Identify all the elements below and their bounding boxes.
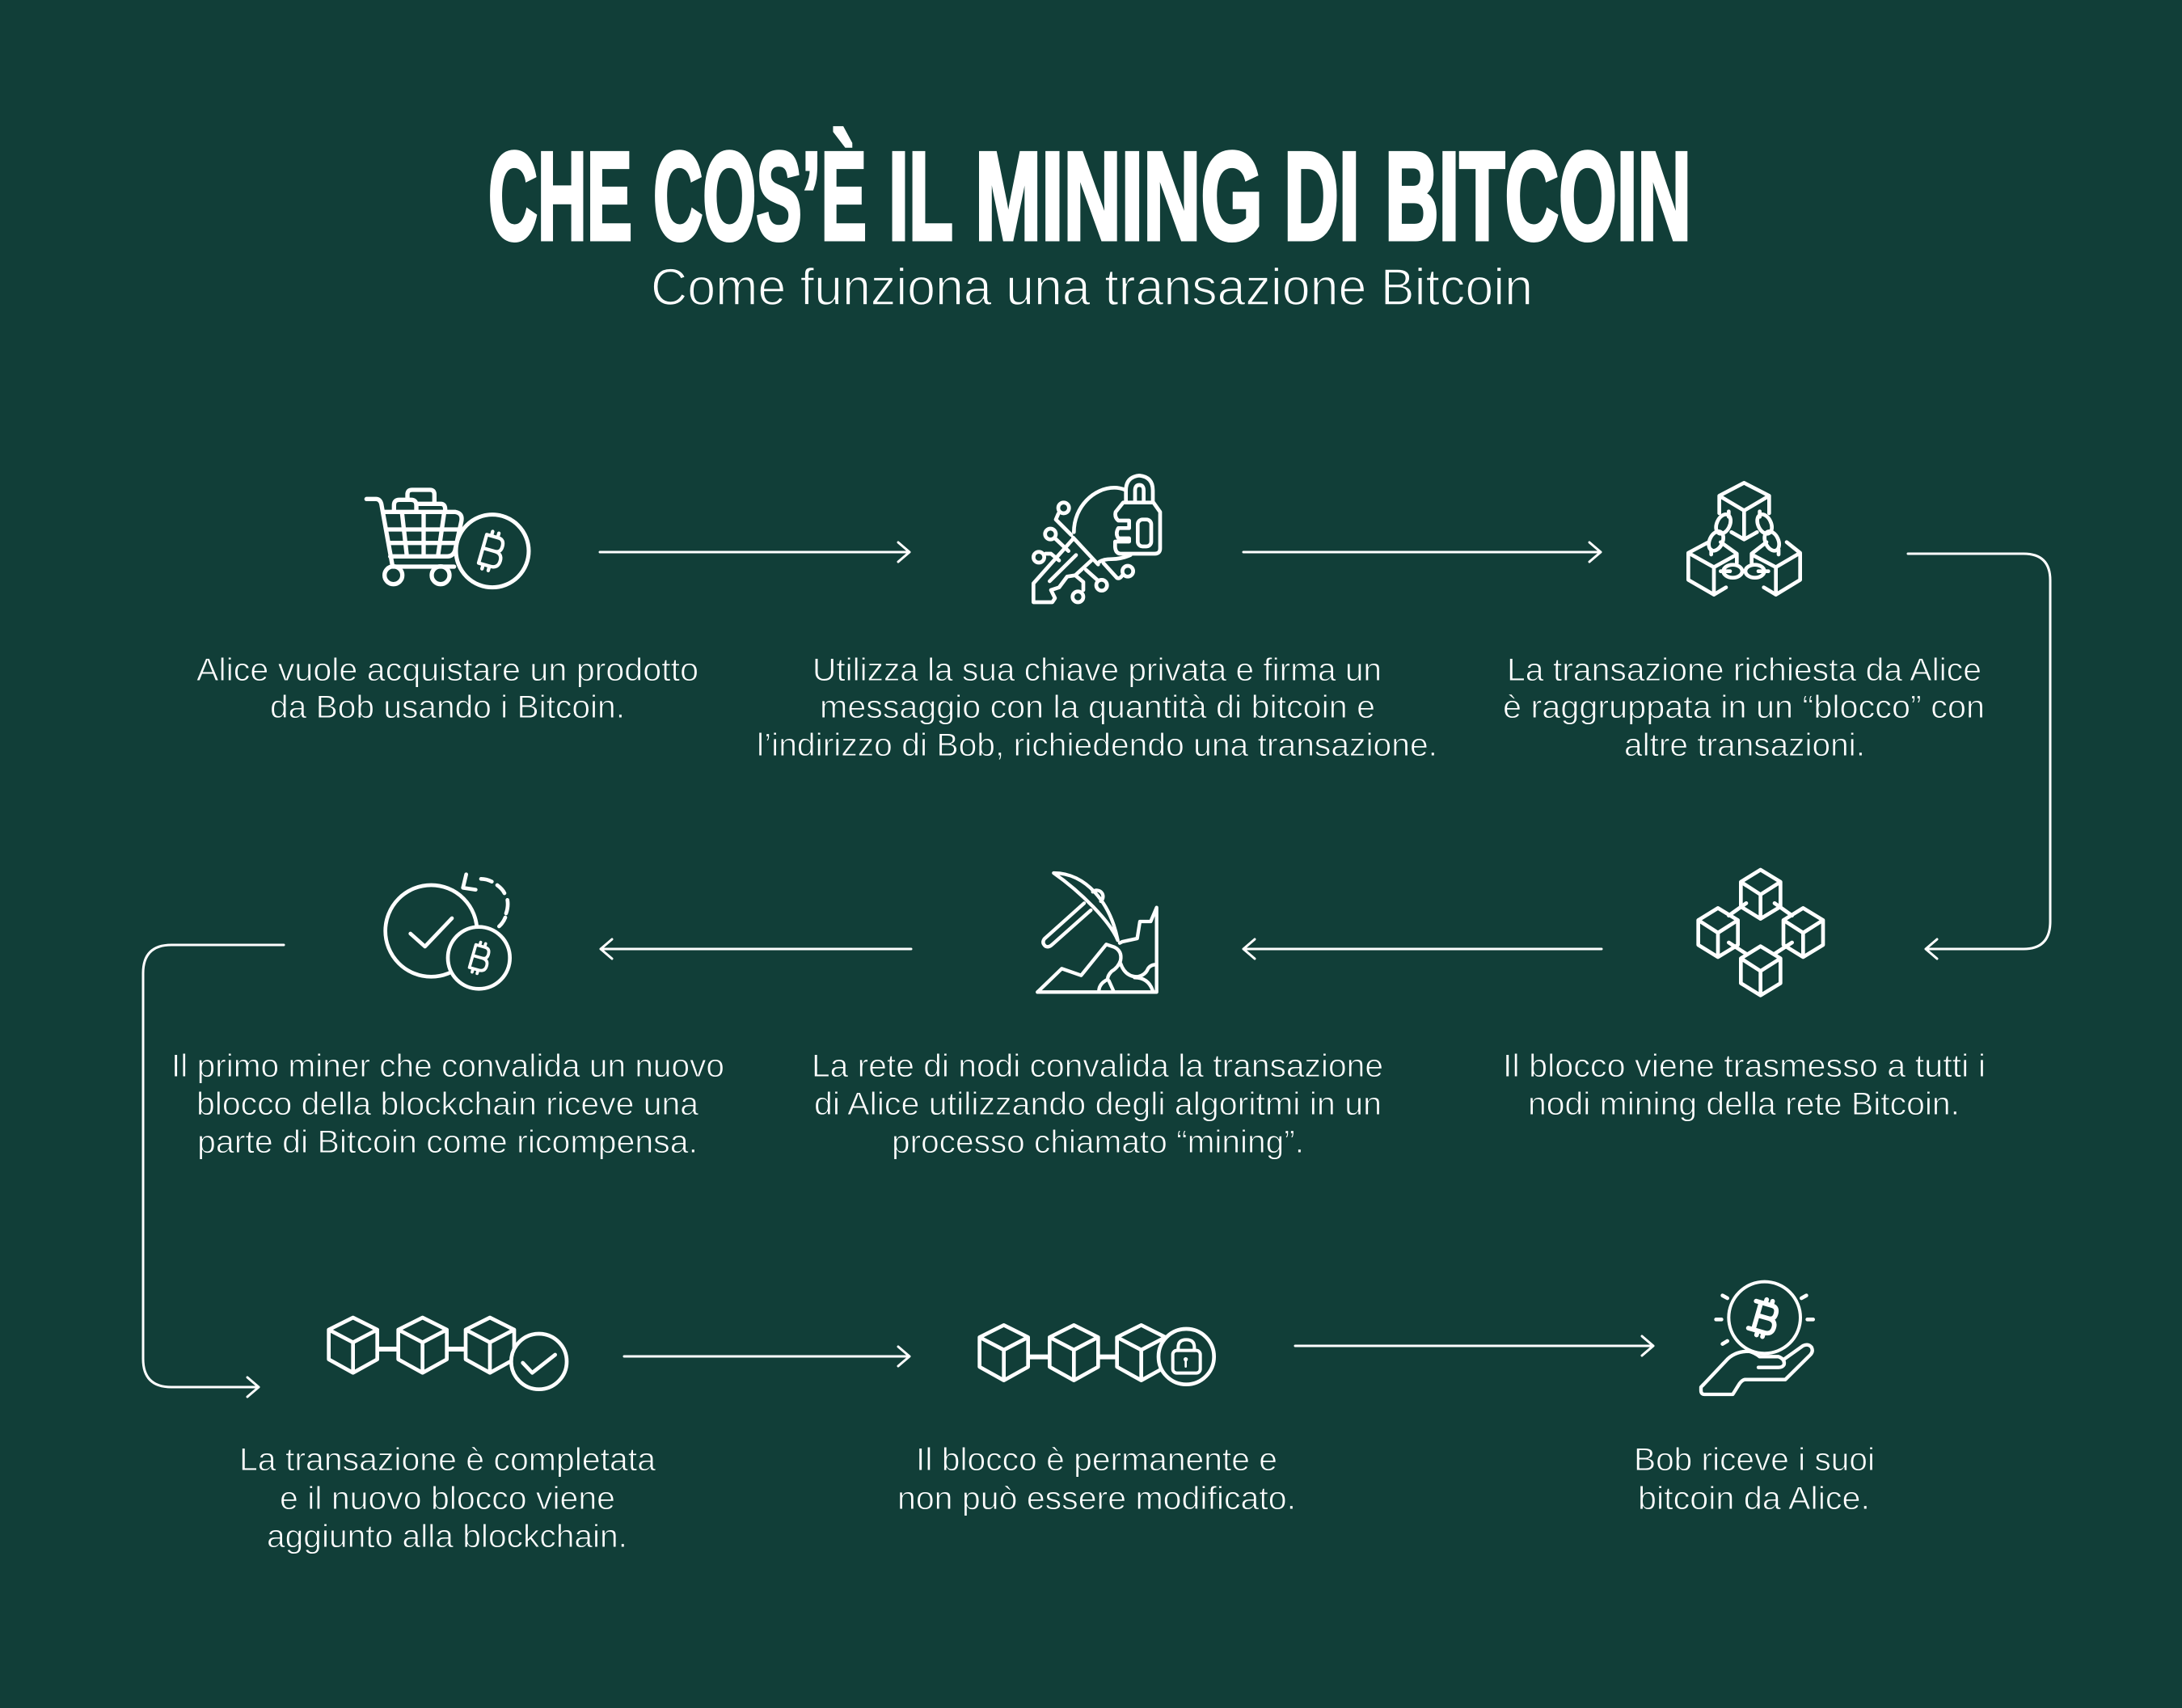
- icon: first miner validated reward: [386, 875, 510, 989]
- step 5 text: processo chiamato “mining”.: [892, 1124, 1304, 1160]
- icon: blockchain with check: [329, 1318, 567, 1390]
- step 9 text: Bob riceve i suoi: [1634, 1442, 1875, 1478]
- step 9 text: bitcoin da Alice.: [1638, 1481, 1870, 1516]
- icon: hand holding bitcoin: [1701, 1282, 1813, 1394]
- title: MINING: [975, 126, 1263, 266]
- step 4 text: [1503, 1048, 1986, 1122]
- arrow: step 5 to 6: [601, 939, 911, 959]
- step 3 text: [1503, 652, 1985, 763]
- step 1 text: da Bob usando i Bitcoin.: [270, 690, 625, 725]
- step 3 text: La transazione richiesta da Alice: [1507, 652, 1982, 688]
- title: DI: [1284, 126, 1360, 266]
- step 5 text: di Alice utilizzando degli algoritmi in un: [814, 1086, 1382, 1122]
- icon: private key and padlock: [1033, 475, 1160, 602]
- icon: blockchain with padlock: [980, 1325, 1214, 1385]
- step 7 text: e il nuovo blocco viene: [280, 1481, 615, 1516]
- arrow: step 6 to 7 connector: [143, 945, 284, 1397]
- step 3 text: altre transazioni.: [1624, 727, 1865, 763]
- step 3 text: è raggruppata in un “blocco” con: [1503, 690, 1985, 725]
- step 2 text: l’indirizzo di Bob, richiedendo una transazione.: [757, 727, 1437, 763]
- arrow: step 3 to 4 connector: [1908, 554, 2050, 959]
- step 6 text: [171, 1048, 724, 1160]
- step 7 text: La transazione è completata: [239, 1442, 656, 1478]
- step 6 text: Il primo miner che convalida un nuovo: [171, 1048, 724, 1084]
- step 4 text: Il blocco viene trasmesso a tutti i: [1503, 1048, 1986, 1084]
- title: BITCOIN: [1385, 126, 1691, 266]
- step 8 text: non può essere modificato.: [897, 1481, 1296, 1516]
- subtitle: Come funziona una transazione Bitcoin: [651, 258, 1533, 316]
- step 6 text: blocco della blockchain riceve una: [196, 1086, 699, 1122]
- step 2 text: Utilizza la sua chiave privata e firma un: [812, 652, 1382, 688]
- icon: shopping cart with bitcoin: [366, 490, 529, 588]
- step 4 text: nodi mining della rete Bitcoin.: [1528, 1086, 1960, 1122]
- step 6 text: parte di Bitcoin come ricompensa.: [197, 1124, 698, 1160]
- step 5 text: [812, 1048, 1383, 1160]
- title: IL: [888, 126, 953, 266]
- step 1 text: Alice vuole acquistare un prodotto: [196, 652, 698, 688]
- step 5 text: La rete di nodi convalida la transazione: [812, 1048, 1383, 1084]
- step 1 text: [196, 652, 698, 725]
- title: CHE: [488, 126, 632, 266]
- step 8 text: Il blocco è permanente e: [916, 1442, 1277, 1478]
- icon: network of blocks: [1699, 870, 1823, 995]
- arrow: step 7 to 8: [624, 1347, 910, 1366]
- arrow: step 4 to 5: [1243, 939, 1602, 959]
- arrow: step 8 to 9: [1295, 1336, 1653, 1356]
- step 7 text: aggiunto alla blockchain.: [267, 1519, 627, 1554]
- arrow: step 2 to 3: [1243, 542, 1601, 562]
- title: [488, 126, 1691, 266]
- icon: pickaxe and mountain: [1037, 873, 1157, 992]
- step 8 text: [897, 1442, 1296, 1516]
- step 9 text: [1634, 1442, 1875, 1516]
- title: COS’È: [653, 126, 867, 266]
- icon: chained blocks: [1688, 483, 1800, 595]
- step 7 text: [239, 1442, 656, 1554]
- step 2 text: [757, 652, 1437, 763]
- step 2 text: messaggio con la quantità di bitcoin e: [820, 690, 1375, 725]
- arrow: step 1 to 2: [600, 542, 910, 562]
